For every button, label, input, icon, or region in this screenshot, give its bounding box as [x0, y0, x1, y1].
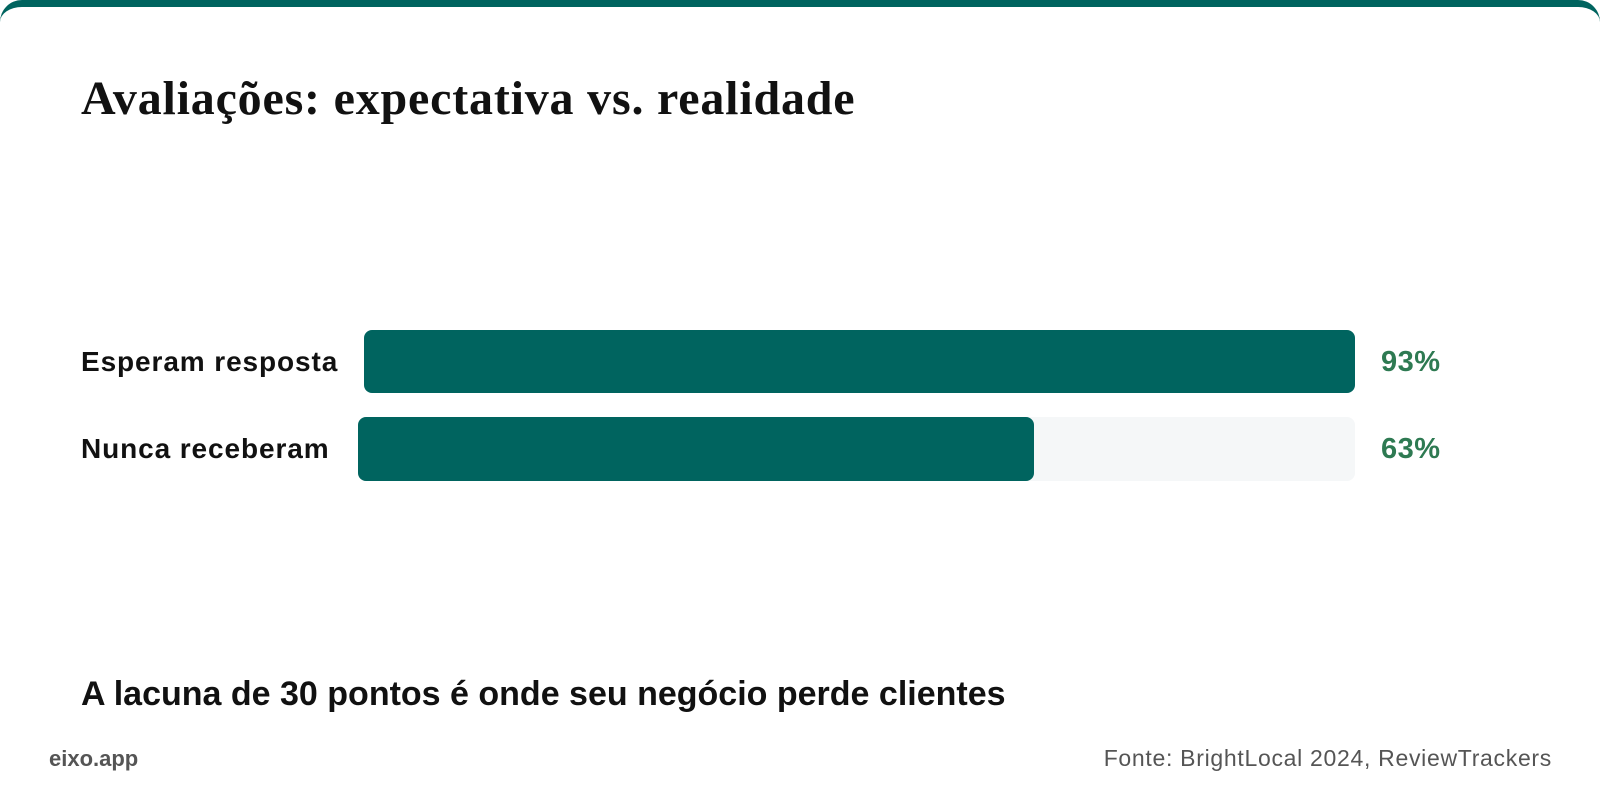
footer source: Fonte: BrightLocal 2024, ReviewTrackers	[1104, 745, 1552, 771]
title: Avaliações: expectativa vs. realidade	[81, 72, 855, 125]
value: 93%: 93%	[1381, 346, 1441, 378]
bar track: 63%	[358, 417, 1355, 481]
row label: esperam resposta: Esperam resposta	[81, 346, 338, 377]
bar: 93%	[364, 330, 1355, 393]
footer brand: eixo.app	[49, 746, 138, 771]
value: 63%: 63%	[1381, 433, 1441, 465]
bar chart	[81, 330, 1441, 481]
bar: 63%	[358, 417, 1034, 481]
subtitle callout: A lacuna de 30 pontos é onde seu negócio perde clientes	[81, 675, 1006, 713]
row label: nunca receberam: Nunca receberam	[81, 433, 330, 464]
